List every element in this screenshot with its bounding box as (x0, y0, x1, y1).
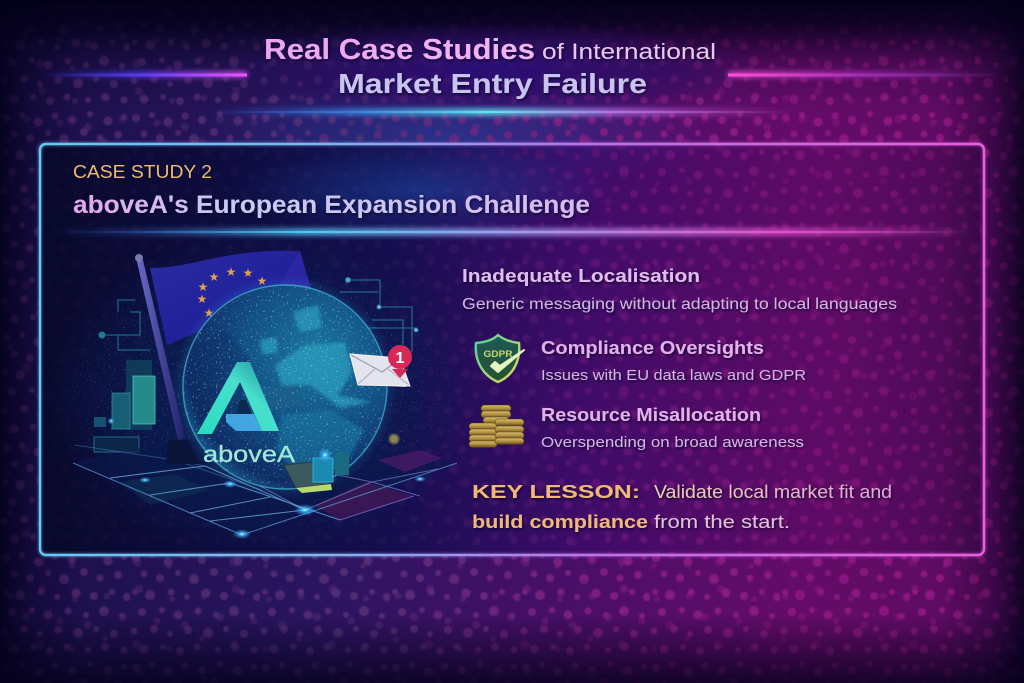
callout: key lesson (472, 481, 892, 532)
text block: resource misallocation (541, 405, 804, 451)
illustration: aboveA European expansion (40, 235, 480, 555)
text block: inadequate localisation: Generic messaging without adapting to local languages (462, 296, 897, 313)
title line 2: Market Entry Failure (338, 68, 647, 99)
callout: key lesson: build compliance (472, 511, 648, 532)
callout: key lesson: from the start. (654, 511, 790, 532)
flag: European Union: ★ (243, 266, 253, 280)
icon: GDPR shield: GDPR (484, 349, 513, 359)
flag: European Union: ★ (266, 286, 276, 300)
text block: compliance oversights (541, 338, 806, 384)
title line 1: Real Case Studies (264, 34, 535, 66)
flag: European Union: ★ (209, 270, 219, 284)
globe (173, 275, 397, 499)
title (264, 34, 716, 99)
heading divider (50, 229, 970, 235)
text block: compliance oversights: Compliance Oversights (541, 338, 764, 358)
title line 1: of International (542, 39, 716, 64)
flag: European Union: ★ (198, 280, 208, 294)
laptop and devices (284, 434, 399, 493)
title underline (210, 109, 790, 115)
logo: aboveA (197, 362, 296, 467)
text block: inadequate localisation (462, 266, 897, 313)
bar chart buildings (94, 360, 155, 452)
flag: European Union: ★ (204, 306, 214, 320)
text block: inadequate localisation: Inadequate Localisation (462, 266, 700, 286)
decorative right title bar (728, 72, 1000, 77)
icon: envelope with notification (350, 345, 412, 387)
icon: gold coins (469, 405, 524, 448)
panel: case study (40, 144, 984, 555)
flag: European Union: ★ (257, 274, 267, 288)
circuit lines (99, 278, 418, 352)
case study label: CASE STUDY 2 (73, 162, 212, 182)
text block: resource misallocation: Overspending on broad awareness (541, 434, 804, 451)
text block: resource misallocation: Resource Misallocation (541, 405, 761, 425)
logo: aboveA: aboveA (203, 441, 296, 467)
floor grid (73, 441, 457, 539)
callout: key lesson: KEY LESSON: (472, 481, 640, 502)
flag pole (135, 254, 200, 464)
decorative left title bar (40, 72, 247, 77)
text block: compliance oversights: Issues with EU data laws and GDPR (541, 367, 806, 384)
flag: European Union (150, 251, 315, 345)
callout: key lesson: Validate local market fit and (654, 481, 892, 502)
icon: envelope with notification: 1 (396, 350, 405, 367)
flag: European Union: ★ (197, 292, 207, 306)
flag: European Union: ★ (226, 265, 236, 279)
icon: GDPR shield (476, 335, 524, 382)
case study heading: aboveA's European Expansion Challenge (73, 191, 590, 219)
